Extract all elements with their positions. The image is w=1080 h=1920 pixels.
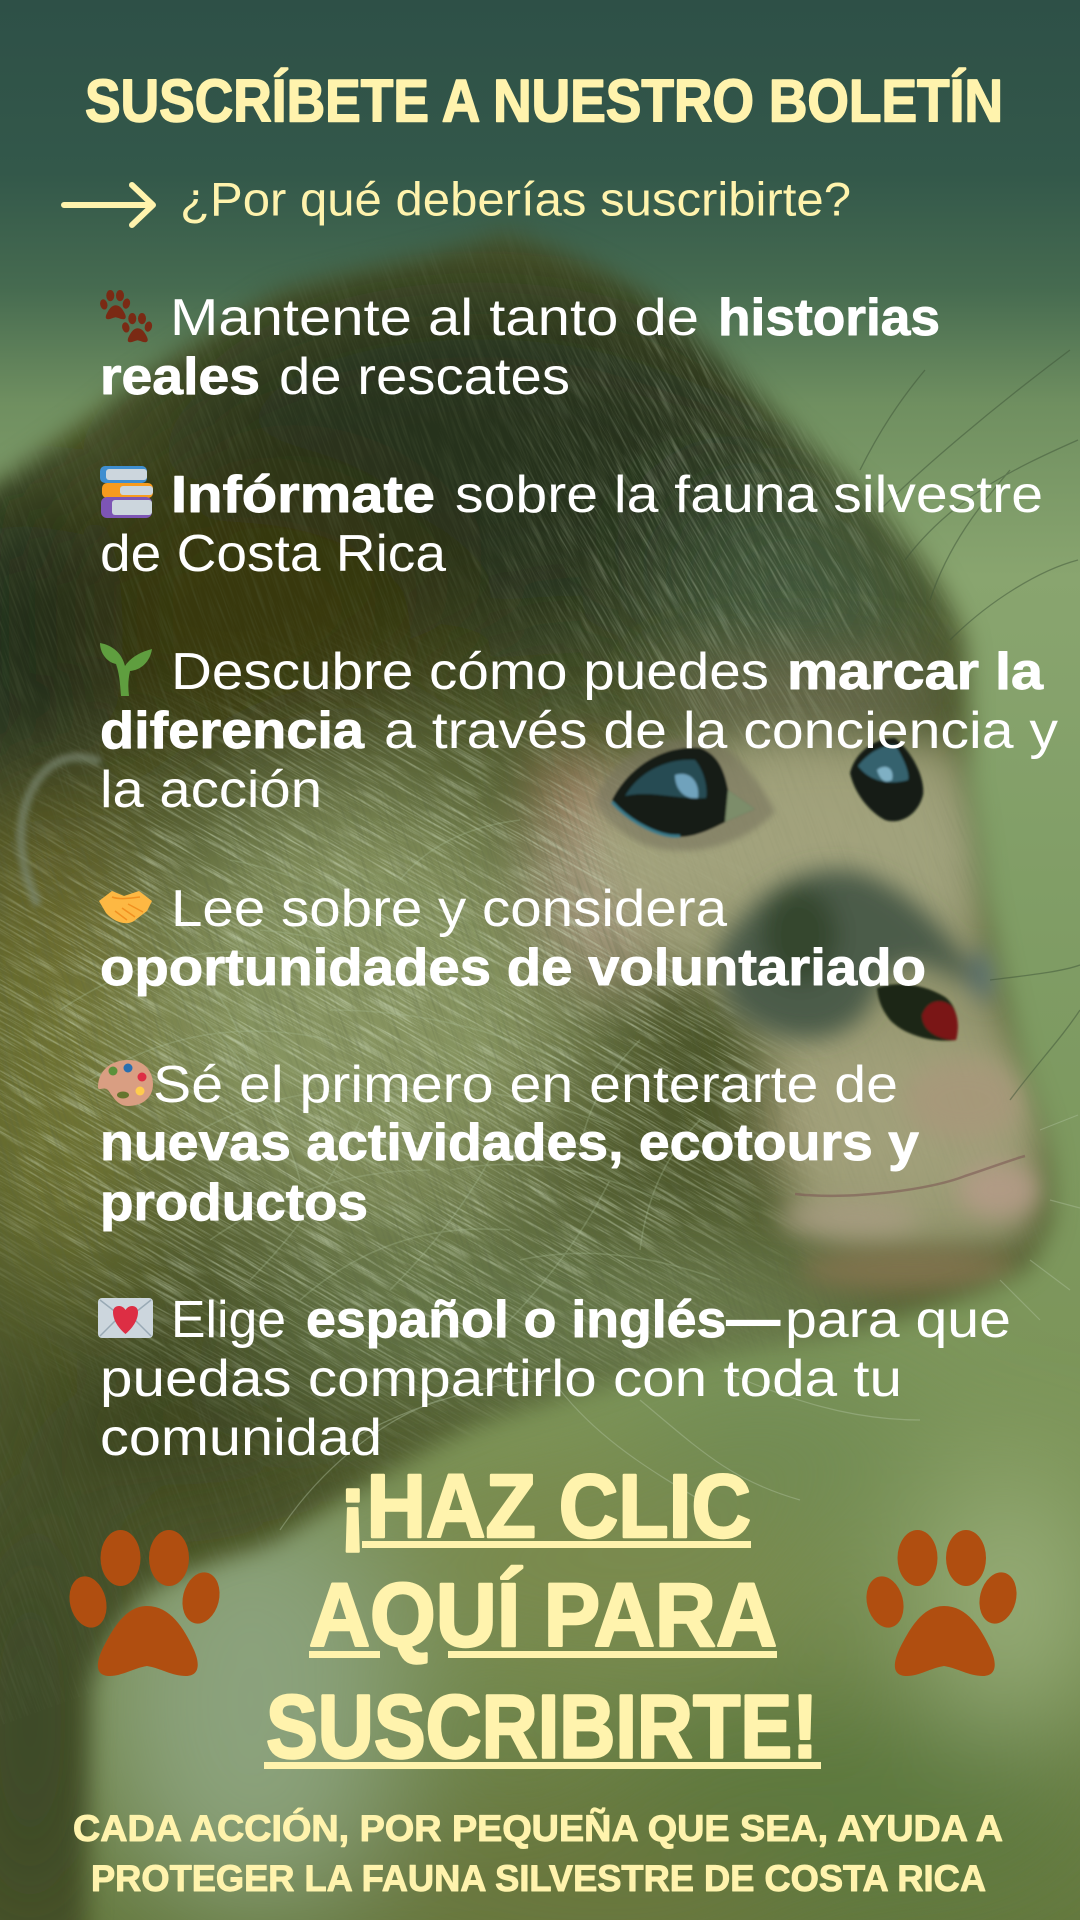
nose band over face (715, 870, 998, 1038)
text: benefit 3: la acción (100, 761, 322, 819)
text: benefit 1: de rescates (279, 348, 570, 406)
text: benefit 2 (100, 466, 1043, 583)
face smoothing over fur texture (600, 744, 1040, 1253)
text: benefit 5: nuevas actividades, ecotours y (100, 1114, 919, 1172)
text: benefit 5: productos (100, 1174, 368, 1232)
text: benefit 4: oportunidades de voluntariado (100, 939, 926, 997)
text: benefit 1: Mantente al tanto de (170, 289, 699, 347)
benefit 3: make a difference (100, 643, 1058, 819)
text: benefit 3 (100, 643, 1058, 819)
loose hairs against background (860, 350, 1080, 1100)
icon: handshake (99, 891, 152, 923)
monkey left eye (595, 739, 775, 851)
monkey right eye (850, 738, 923, 821)
subheading: ¿Por qué deberías suscribirte? (180, 172, 851, 226)
icon: seedling (100, 643, 152, 696)
text: benefit 3: marcar la (787, 643, 1044, 701)
text: benefit 3: Descubre cómo puedes (171, 643, 769, 701)
call to action (264, 1457, 821, 1778)
benefit 1: real rescue stories (99, 289, 940, 406)
text: benefit 6: Elige (171, 1291, 286, 1349)
icon: left paw (64, 1530, 225, 1676)
text: benefit 6: español o inglés— (306, 1291, 780, 1349)
background: lower blurred chest and foliage (100, 1390, 1080, 1920)
fur strands on crown (470, 293, 938, 743)
text: benefit 2: sobre la fauna silvestre (455, 466, 1043, 524)
monkey ear (21, 757, 100, 905)
lips and chin (780, 1060, 1042, 1292)
benefit 2: learn about wildlife (100, 466, 1043, 583)
fur strands: light on cheek (0, 654, 798, 1462)
text: benefit 6: comunidad (100, 1409, 382, 1467)
light whiskers at chin and chest (280, 1115, 1080, 1530)
fur strands: dark (0, 260, 802, 1540)
benefit 4: volunteering (99, 880, 926, 997)
text: benefit 5 (100, 1056, 919, 1232)
fur colour regions (0, 280, 930, 1920)
CTA line 3: SUSCRIBIRTE! (266, 1678, 818, 1778)
icon: right paw (861, 1530, 1022, 1676)
arrow (64, 185, 153, 225)
text: benefit 6: puedas compartirlo con toda tu (100, 1350, 902, 1408)
icon: paw prints (99, 290, 153, 342)
text: benefit 6: para que (785, 1291, 1011, 1349)
text: benefit 1 (100, 289, 940, 406)
text: benefit 1: reales (100, 348, 260, 406)
face skin (530, 650, 1040, 1215)
benefit list (98, 289, 1058, 1467)
mouth line (795, 1156, 1025, 1196)
icon: books (100, 466, 153, 518)
CTA line 1: ¡HAZ CLIC (339, 1457, 751, 1557)
text: benefit 5: Sé el primero en enterarte de (153, 1056, 898, 1114)
icon: palette (98, 1060, 153, 1106)
text: benefit 2: de Costa Rica (100, 525, 446, 583)
benefit 5: new activities (98, 1056, 919, 1232)
text: benefit 6 (100, 1291, 1011, 1467)
icon: love letter (98, 1298, 153, 1338)
text: benefit 1: historias (718, 289, 940, 347)
text: benefit 3: a través de la conciencia y (384, 702, 1058, 760)
text: benefit 4: Lee sobre y considera (171, 880, 727, 938)
fur strands radiating over cheek (60, 820, 720, 1330)
benefit 6: language choice (98, 1291, 1011, 1467)
closing message (73, 1807, 1003, 1899)
closing message: PROTEGER LA FAUNA SILVESTRE DE COSTA RICA (91, 1858, 986, 1899)
closing message: CADA ACCIÓN, POR PEQUEÑA QUE SEA, AYUDA A (73, 1807, 1003, 1849)
monkey nostril (877, 984, 958, 1041)
text: benefit 4 (100, 880, 926, 997)
text: benefit 2: Infórmate (171, 466, 435, 524)
text: benefit 3: diferencia (100, 702, 365, 760)
CTA line 2: AQUÍ PARA (309, 1565, 777, 1666)
